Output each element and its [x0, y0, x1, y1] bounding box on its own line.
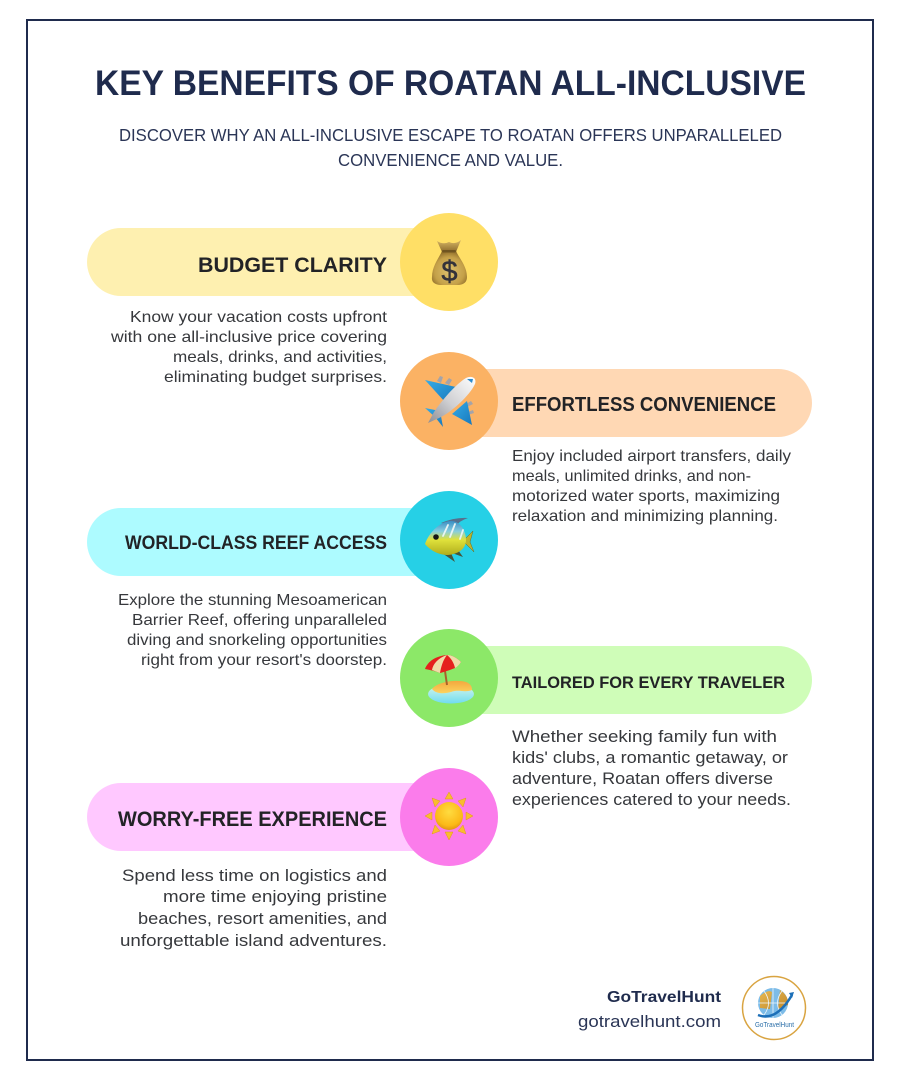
- icon circle: effortless convenience: [400, 352, 498, 450]
- text: world-class reef access: right from your resort's doorstep.: [141, 652, 387, 669]
- icon circle: tailored for every traveler: [400, 629, 498, 727]
- icon: airplane: [425, 376, 475, 427]
- text: worry-free experience: Spend less time on logistics and: [122, 866, 387, 885]
- heading: effortless convenience: EFFORTLESS CONVENIENCE: [512, 394, 776, 416]
- panel: effortless convenience: [400, 352, 812, 525]
- text: world-class reef access: diving and snorkeling opportunities: [127, 632, 387, 649]
- text: tailored for every traveler: experiences catered to your needs.: [512, 790, 791, 809]
- text: effortless convenience: Enjoy included airport transfers, daily: [512, 448, 791, 465]
- icon: sun: [425, 792, 473, 840]
- icon: money bag: [432, 240, 467, 288]
- banner: world-class reef access: [87, 508, 440, 576]
- text: effortless convenience: relaxation and minimizing planning.: [512, 508, 778, 525]
- text: world-class reef access: Barrier Reef, offering unparalleled: [132, 612, 387, 629]
- text: tailored for every traveler: [512, 727, 791, 809]
- text: budget clarity: with one all-inclusive price covering: [110, 329, 387, 346]
- text: budget clarity: [110, 309, 388, 386]
- subtitle: [119, 125, 782, 170]
- text: budget clarity: meals, drinks, and activities,: [173, 349, 387, 366]
- brand url: gotravelhunt.com: [578, 1012, 721, 1031]
- icon: beach umbrella on island: [425, 655, 474, 704]
- banner: tailored for every traveler: [460, 646, 812, 714]
- text: tailored for every traveler: kids' clubs, a romantic getaway, or: [512, 748, 788, 767]
- text: tailored for every traveler: adventure, Roatan offers diverse: [512, 769, 773, 788]
- text: budget clarity: eliminating budget surprises.: [164, 369, 387, 386]
- icon: money bag: $: [441, 256, 458, 288]
- panel: budget clarity: [87, 213, 498, 386]
- text: worry-free experience: [120, 866, 387, 950]
- heading: world-class reef access: WORLD-CLASS REEF ACCESS: [125, 533, 387, 554]
- text: worry-free experience: beaches, resort amenities, and: [138, 909, 387, 928]
- text: effortless convenience: motorized water sports, maximizing: [512, 488, 780, 505]
- icon circle: world-class reef access: [400, 491, 498, 589]
- icon: tropical fish: [425, 518, 474, 562]
- footer brand: [578, 976, 806, 1040]
- heading: worry-free experience: WORRY-FREE EXPERIENCE: [118, 808, 387, 831]
- title: KEY BENEFITS OF ROATAN ALL-INCLUSIVE: [95, 64, 806, 103]
- panel: tailored for every traveler: [400, 629, 812, 809]
- text: effortless convenience: [512, 448, 791, 525]
- banner: budget clarity: [87, 228, 440, 296]
- icon circle: budget clarity: [400, 213, 498, 311]
- subtitle: DISCOVER WHY AN ALL-INCLUSIVE ESCAPE TO ROATAN OFFERS UNPARALLELED: [119, 125, 782, 145]
- icon circle: worry-free experience: [400, 768, 498, 866]
- text: effortless convenience: meals, unlimited drinks, and non-: [512, 468, 751, 485]
- text: world-class reef access: Explore the stunning Mesoamerican: [118, 592, 387, 609]
- text: tailored for every traveler: Whether seeking family fun with: [512, 727, 777, 746]
- banner: worry-free experience: [87, 783, 440, 851]
- heading: budget clarity: BUDGET CLARITY: [198, 254, 387, 277]
- text: world-class reef access: [118, 592, 387, 669]
- heading: tailored for every traveler: TAILORED FOR EVERY TRAVELER: [512, 673, 785, 692]
- text: budget clarity: Know your vacation costs upfront: [130, 309, 388, 326]
- text: worry-free experience: more time enjoying pristine: [163, 887, 387, 906]
- text: worry-free experience: unforgettable island adventures.: [120, 931, 387, 950]
- logo: [742, 976, 806, 1040]
- panel: worry-free experience: [87, 768, 498, 950]
- logo: GoTravelHunt: [755, 1022, 794, 1029]
- subtitle: CONVENIENCE AND VALUE.: [338, 150, 563, 170]
- panel: world-class reef access: [87, 491, 498, 669]
- banner: effortless convenience: [460, 369, 812, 437]
- brand name: GoTravelHunt: [607, 989, 722, 1006]
